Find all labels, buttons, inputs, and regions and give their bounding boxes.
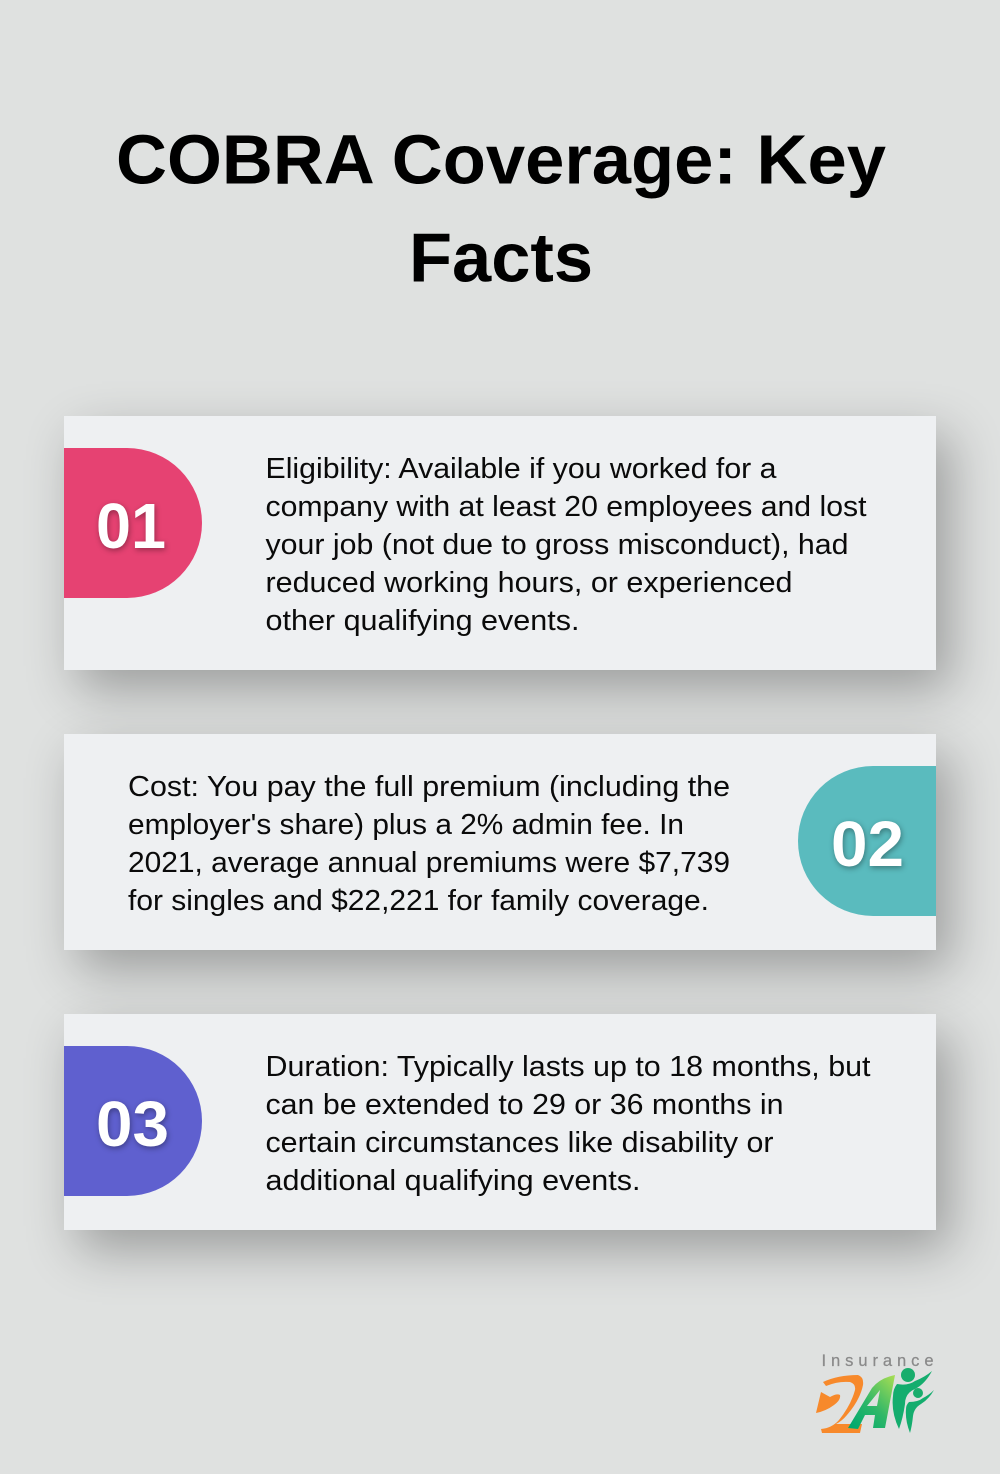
badge: 02: 02: [831, 808, 904, 880]
text: duration description: [266, 1051, 870, 1197]
text: cost description: for singles and $22,221 for family coverage.: [128, 885, 709, 917]
badge: 03: [64, 1046, 202, 1196]
text: cost description: [128, 771, 730, 917]
text: eligibility description: reduced working hours, or experienced: [266, 567, 792, 599]
icon: Insurance2All logo: [816, 1352, 934, 1433]
text: eligibility description: Eligibility: Available if you worked for a: [266, 453, 777, 485]
text: eligibility description: other qualifying events.: [266, 605, 580, 637]
title: [116, 120, 886, 297]
badge: 01: 01: [96, 490, 166, 562]
panel: eligibility: [64, 416, 936, 670]
text: duration description: certain circumstances like disability or: [266, 1127, 774, 1159]
panel: duration: [64, 1014, 936, 1230]
text: duration description: can be extended to 29 or 36 months in: [266, 1089, 784, 1121]
text: eligibility description: [266, 453, 866, 637]
icon: Insurance2All logo: Insurance: [822, 1352, 934, 1370]
text: eligibility description: your job (not due to gross misconduct), had: [266, 529, 848, 561]
text: cost description: Cost: You pay the full premium (including the: [128, 771, 730, 803]
text: cost description: 2021, average annual premiums were $7,739: [128, 847, 730, 879]
badge: 02: [798, 766, 936, 916]
text: duration description: additional qualifying events.: [266, 1165, 640, 1197]
badge: 03: 03: [96, 1088, 169, 1160]
title: COBRA Coverage: Key: [116, 120, 886, 198]
panel: cost: [64, 734, 936, 950]
text: duration description: Duration: Typically lasts up to 18 months, but: [266, 1051, 870, 1083]
badge: 01: [64, 448, 202, 598]
text: eligibility description: company with at least 20 employees and lost: [266, 491, 866, 523]
title: Facts: [409, 219, 593, 297]
text: cost description: employer's share) plus a 2% admin fee. In: [128, 809, 684, 841]
